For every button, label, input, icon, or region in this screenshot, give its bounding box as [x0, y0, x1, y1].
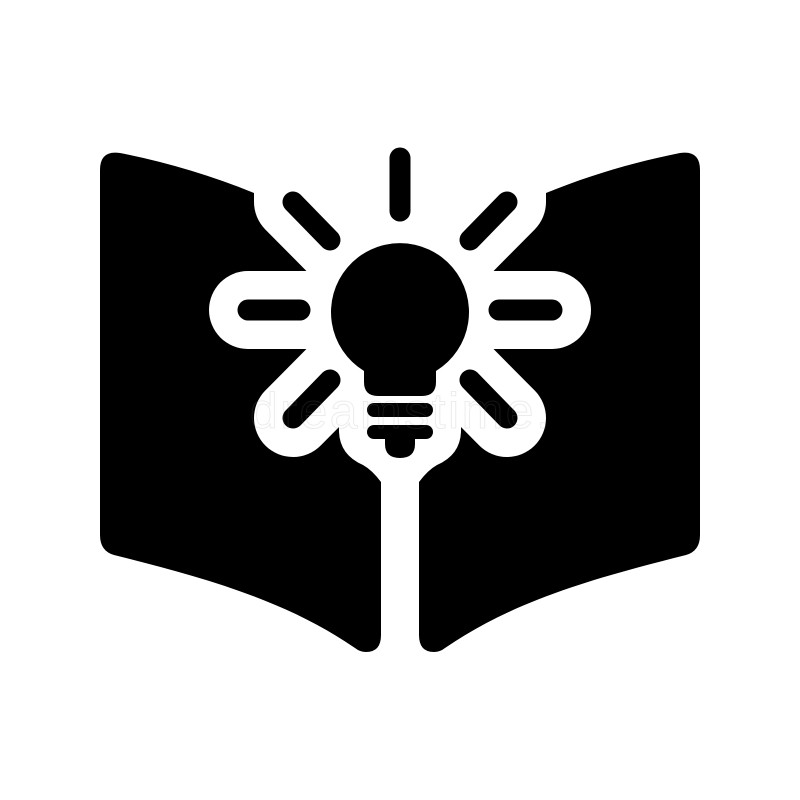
book: right page	[419, 153, 700, 652]
white halo around the rays and bulb	[248, 202, 552, 418]
watermark: dreamstime.	[250, 383, 550, 439]
white halo around the bulb base	[339, 380, 461, 482]
light bulb	[331, 243, 469, 458]
book: left page	[100, 153, 381, 652]
light rays	[248, 158, 552, 418]
